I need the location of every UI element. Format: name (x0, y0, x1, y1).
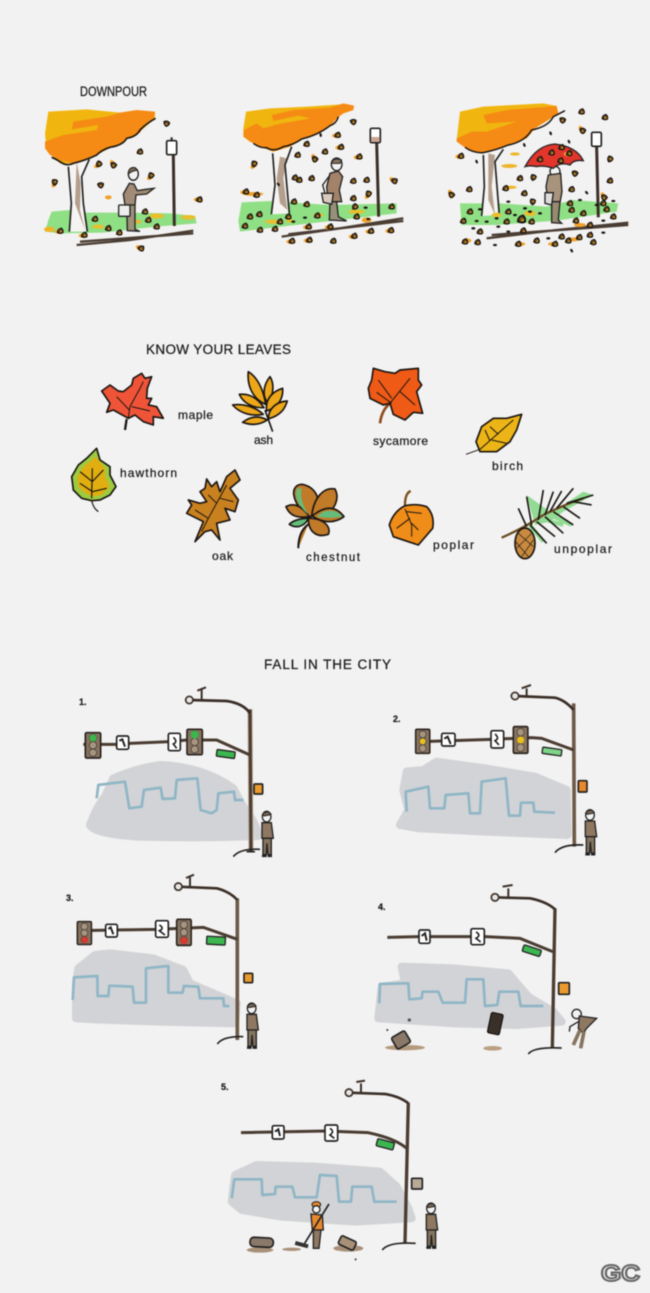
traffic arm (83, 740, 250, 755)
skyline backdrop (400, 762, 568, 835)
person under umbrella (545, 166, 562, 223)
signal and signs (85, 729, 263, 794)
falling leaves (447, 109, 616, 253)
panel: city 5 (232, 1081, 438, 1260)
falling leaves (240, 118, 399, 244)
panel: city 2 (400, 685, 597, 854)
skyline backdrop (378, 967, 562, 1025)
grass (460, 200, 618, 225)
label: oak: oak (212, 549, 234, 563)
panel: downpour 1 (44, 109, 203, 253)
panel: downpour 3 (447, 103, 628, 253)
tree canopy (243, 103, 354, 152)
number 5: 5. (221, 1082, 229, 1092)
falling leaves (44, 120, 203, 253)
number 2: 2. (393, 714, 401, 724)
fallen signals (385, 1012, 503, 1051)
bus stop post (592, 132, 601, 217)
traffic arm (387, 937, 553, 952)
skyline line (232, 1175, 397, 1202)
number 4: 4. (378, 902, 386, 912)
person (426, 1203, 438, 1248)
lamp post (491, 885, 562, 1054)
leaf: oak (187, 470, 240, 542)
lamp post (511, 685, 583, 853)
label: sycamore: sycamore (373, 434, 428, 448)
label: ash: ash (254, 433, 273, 447)
logo: GC: GC (601, 1260, 640, 1286)
title: Downpour: DOWNPOUR (80, 84, 147, 99)
bus stop post (167, 137, 177, 226)
skyline line (379, 979, 543, 1006)
red umbrella (525, 144, 583, 168)
lamp post (345, 1081, 416, 1250)
tree canopy (457, 103, 565, 153)
signal and signs (416, 727, 587, 792)
label: unpoplar: unpoplar (554, 542, 612, 556)
heading: Know your leaves: KNOW YOUR LEAVES (146, 342, 291, 357)
sidewalk line (282, 218, 403, 237)
person (247, 1003, 258, 1048)
leaf: sycamore (368, 368, 423, 423)
leaf: unpoplar pine branch (502, 488, 593, 559)
worker sweeping (295, 1202, 329, 1248)
person with bag (322, 158, 347, 221)
sidewalk line (487, 223, 628, 238)
leaf: ash (233, 372, 287, 432)
panel: downpour 2 (238, 103, 403, 244)
tree trunk (271, 147, 292, 214)
lamp post (175, 875, 243, 1044)
sidewalk line (77, 231, 193, 245)
skyline backdrop (76, 953, 237, 1023)
number 1: 1. (79, 697, 87, 707)
leaf: birch (466, 414, 522, 454)
skyline backdrop (232, 1165, 412, 1222)
leaf: maple (102, 373, 163, 430)
skyline backdrop (90, 765, 258, 837)
leaf: poplar (389, 491, 433, 545)
bending person (569, 1009, 597, 1048)
skyline line (97, 778, 243, 813)
label: maple: maple (178, 408, 213, 422)
label: poplar: poplar (433, 538, 474, 552)
skyline line (73, 966, 229, 1006)
grass (45, 210, 197, 233)
label: birch: birch (492, 459, 523, 473)
signs (419, 929, 569, 994)
traffic arm (422, 738, 574, 750)
tree trunk (482, 149, 503, 216)
lamp post (186, 687, 260, 857)
person (585, 810, 597, 854)
leaf: chestnut (286, 484, 344, 548)
panel: city 4 (378, 885, 597, 1054)
signs (272, 1125, 422, 1189)
leaf: hawthorn (72, 448, 116, 512)
leaves chart group 2 (368, 368, 593, 559)
traffic arm (241, 1131, 407, 1148)
number 3: 3. (66, 893, 74, 903)
traffic arm (80, 927, 237, 939)
debris piles (247, 1235, 363, 1260)
skyline line (406, 778, 555, 816)
heading: Fall in the city: FALL IN THE CITY (264, 657, 391, 672)
panel: city 1 (83, 687, 273, 857)
signal and signs (77, 919, 253, 983)
person looking up (119, 168, 154, 231)
leaves chart group 1 (72, 372, 344, 548)
grass (238, 201, 397, 232)
bus stop post (370, 128, 380, 217)
panel: city 3 (73, 875, 258, 1048)
tree canopy (45, 109, 156, 165)
label: chestnut: chestnut (306, 552, 361, 564)
person (262, 811, 273, 856)
label: hawthorn: hawthorn (120, 466, 177, 480)
tree trunk (68, 159, 89, 232)
